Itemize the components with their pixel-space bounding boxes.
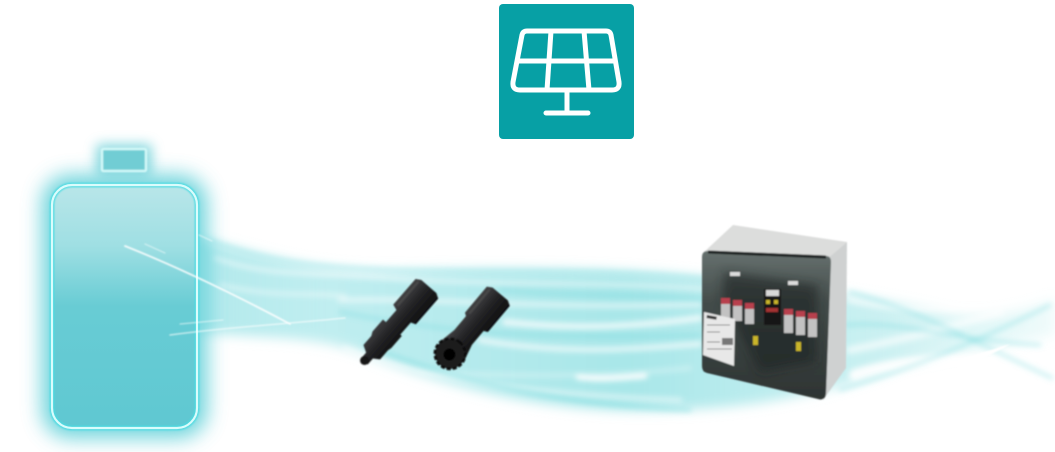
battery body — [52, 185, 197, 428]
wave: main flow band — [198, 238, 1055, 410]
centre module — [764, 289, 781, 325]
energy flow waves — [198, 238, 1055, 410]
breakers left — [721, 298, 754, 324]
junction box — [702, 225, 847, 400]
wave: soft white ribbons — [215, 258, 1040, 400]
icon: solar panel tile — [499, 4, 634, 139]
yellow terminals — [753, 336, 801, 351]
battery — [42, 144, 345, 438]
dark interior — [722, 272, 818, 372]
box front cover — [702, 251, 831, 399]
battery glow — [42, 175, 207, 438]
product label — [703, 312, 735, 366]
battery light streaks — [125, 235, 345, 335]
wave: bright right streak — [925, 344, 1010, 372]
box top face — [703, 225, 847, 258]
wave: teal strands — [210, 240, 1052, 410]
small tags — [730, 272, 798, 285]
battery cap — [102, 149, 146, 171]
right connector — [429, 284, 512, 375]
breakers right — [784, 309, 817, 337]
left connector — [350, 277, 440, 374]
box right side — [823, 242, 847, 400]
